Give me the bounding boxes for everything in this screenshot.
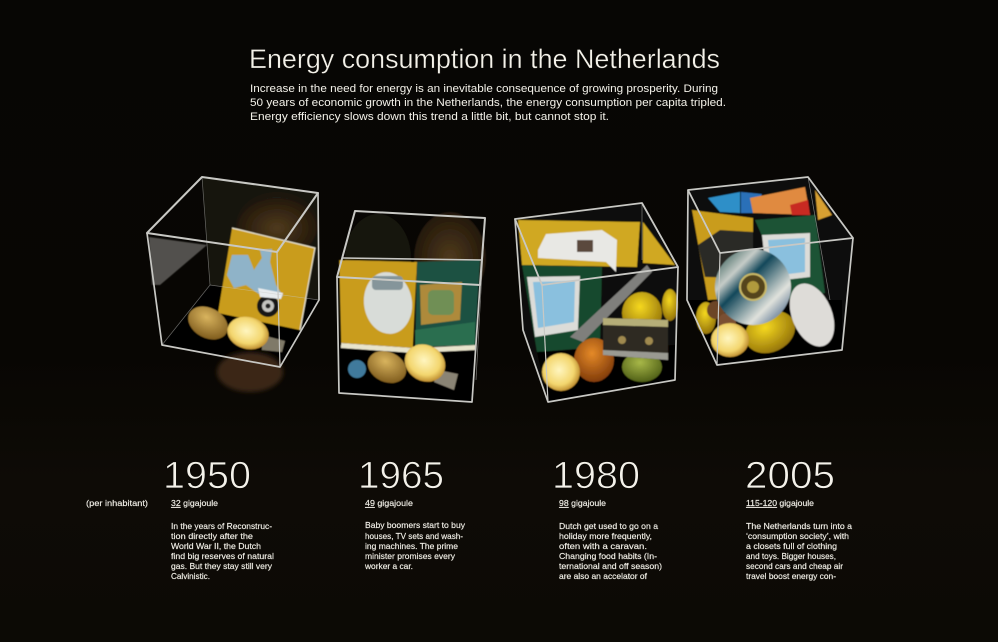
glass edges [515, 203, 678, 402]
description 2005: ‘consumption society’, with [746, 531, 849, 541]
description 2005: and toys. Bigger houses, [746, 551, 836, 561]
description 1965: worker a car. [364, 561, 413, 571]
column 1965 [358, 455, 466, 571]
description 1980: are also an accelator of [559, 571, 648, 581]
value 2005: 115-120 gigajoule [746, 498, 814, 508]
description 1950: gas. But they stay still very [171, 561, 273, 571]
remote control [570, 265, 652, 342]
description 1950: Calvinistic. [171, 571, 210, 581]
intro text: 50 years of economic growth in the Netherlands, the energy consumption per capita tripled. [250, 97, 726, 109]
cube 1950 [147, 177, 319, 392]
intro text [250, 83, 726, 123]
glass edges [147, 177, 319, 367]
description 1965: ing machines. The prime [365, 541, 458, 551]
description 1950 [171, 521, 274, 581]
column 1950 [163, 455, 274, 581]
description 1950: find big reserves of natural [171, 551, 274, 561]
description 2005: The Netherlands turn into a [746, 521, 852, 531]
description 1950: World War II, the Dutch [171, 541, 261, 551]
year 1950: 1950 [163, 455, 251, 497]
cube 1980 [515, 203, 678, 402]
description 2005 [746, 521, 852, 581]
computer mouse [781, 277, 843, 353]
year 1980: 1980 [552, 455, 640, 497]
per inhabitant label: (per inhabitant) [86, 498, 148, 508]
description 1965: minister promises every [365, 551, 456, 561]
glass edges [337, 211, 485, 402]
description 2005: a closets full of clothing [746, 541, 837, 551]
description 1980: Dutch get used to go on a [559, 521, 658, 531]
description 1965 [364, 520, 466, 571]
cube 1965 [337, 211, 486, 402]
description 1980 [559, 521, 662, 581]
fruit and kiwi [696, 301, 802, 361]
intro text: Energy efficiency slows down this trend a little bit, but cannot stop it. [250, 111, 609, 123]
vw badge [348, 360, 366, 378]
description 1980: ternational and off season) [559, 561, 662, 571]
description 1980: holiday more frequently, [559, 531, 652, 541]
potato [363, 345, 411, 389]
monitor [527, 276, 580, 337]
fruit [574, 289, 678, 382]
light bulb [542, 353, 580, 391]
value 1965: 49 gigajoule [365, 498, 413, 508]
compact disc [715, 249, 791, 325]
light bulb [224, 312, 285, 354]
year 2005: 2005 [745, 455, 835, 497]
light bulb [398, 337, 458, 390]
title: Energy consumption in the Netherlands [249, 44, 720, 74]
magazine with scooter [218, 228, 315, 330]
magazine [692, 210, 825, 300]
magazine with caravan [518, 220, 675, 352]
klm packs [708, 187, 832, 220]
description 2005: second cars and cheap air [746, 561, 843, 571]
intro text: Increase in the need for energy is an inevitable consequence of growing prosperity. During [250, 83, 718, 95]
description 2005: travel boost energy con- [746, 571, 836, 581]
magazine with beetle and tv [339, 260, 480, 348]
glass edges [687, 177, 853, 365]
column 2005 [745, 455, 852, 581]
light bulb [711, 323, 749, 357]
description 1965: Baby boomers start to buy [365, 520, 466, 530]
description 1950: In the years of Reconstruc- [171, 521, 272, 531]
cassette [603, 318, 668, 360]
description 1950: tion directly after the [171, 531, 253, 541]
value 1950: 32 gigajoule [171, 498, 218, 508]
cube 2005 [687, 177, 853, 365]
column 1980 [552, 455, 662, 581]
description 1980: often with a caravan. [559, 541, 647, 551]
value 1980: 98 gigajoule [559, 498, 606, 508]
description 1965: houses, TV sets and wash- [365, 531, 463, 541]
potato [182, 300, 234, 346]
year 1965: 1965 [358, 455, 444, 497]
description 1980: Changing food habits (In- [559, 551, 657, 561]
